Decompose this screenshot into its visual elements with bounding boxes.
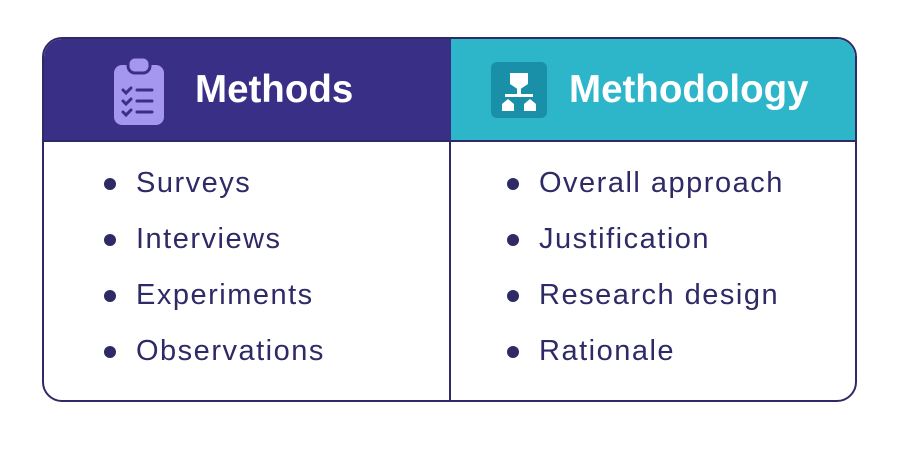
item: Justification	[539, 223, 710, 255]
header: Methodology	[451, 39, 855, 140]
item: Research design	[539, 279, 779, 311]
item: Overall approach	[539, 167, 784, 199]
item: Experiments	[136, 279, 314, 311]
item: Surveys	[136, 167, 251, 199]
item: Interviews	[136, 223, 282, 255]
list: methods	[104, 167, 325, 367]
icon: clipboard	[114, 58, 164, 125]
item: Observations	[136, 335, 325, 367]
icon: hierarchy	[491, 62, 547, 118]
heading: Methodology: Methodology	[569, 68, 809, 111]
item: Rationale	[539, 335, 675, 367]
comparison card	[42, 37, 857, 402]
heading: Methods: Methods	[195, 68, 353, 111]
list: methodology	[507, 167, 784, 367]
header: Methods	[44, 39, 451, 140]
